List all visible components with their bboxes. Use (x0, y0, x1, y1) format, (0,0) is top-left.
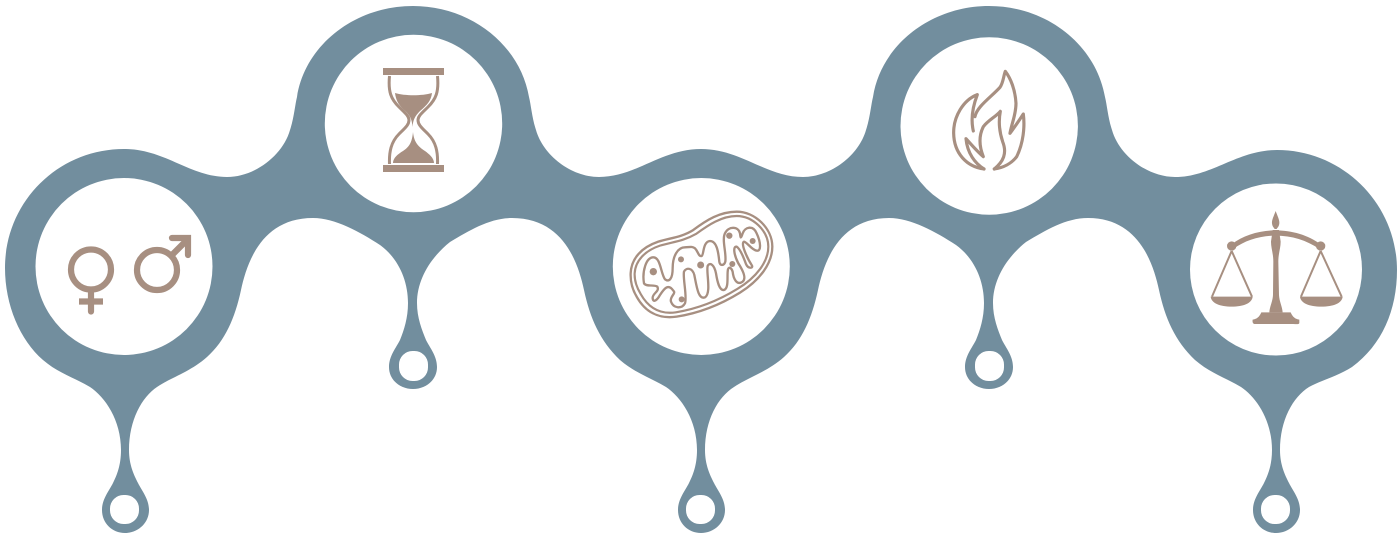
icon: balance scales (1211, 211, 1343, 324)
icon: female and male symbols (71, 238, 188, 312)
icon: mitochondrion (631, 212, 772, 317)
icon: hourglass (383, 68, 444, 172)
icon: flame (954, 71, 1024, 169)
